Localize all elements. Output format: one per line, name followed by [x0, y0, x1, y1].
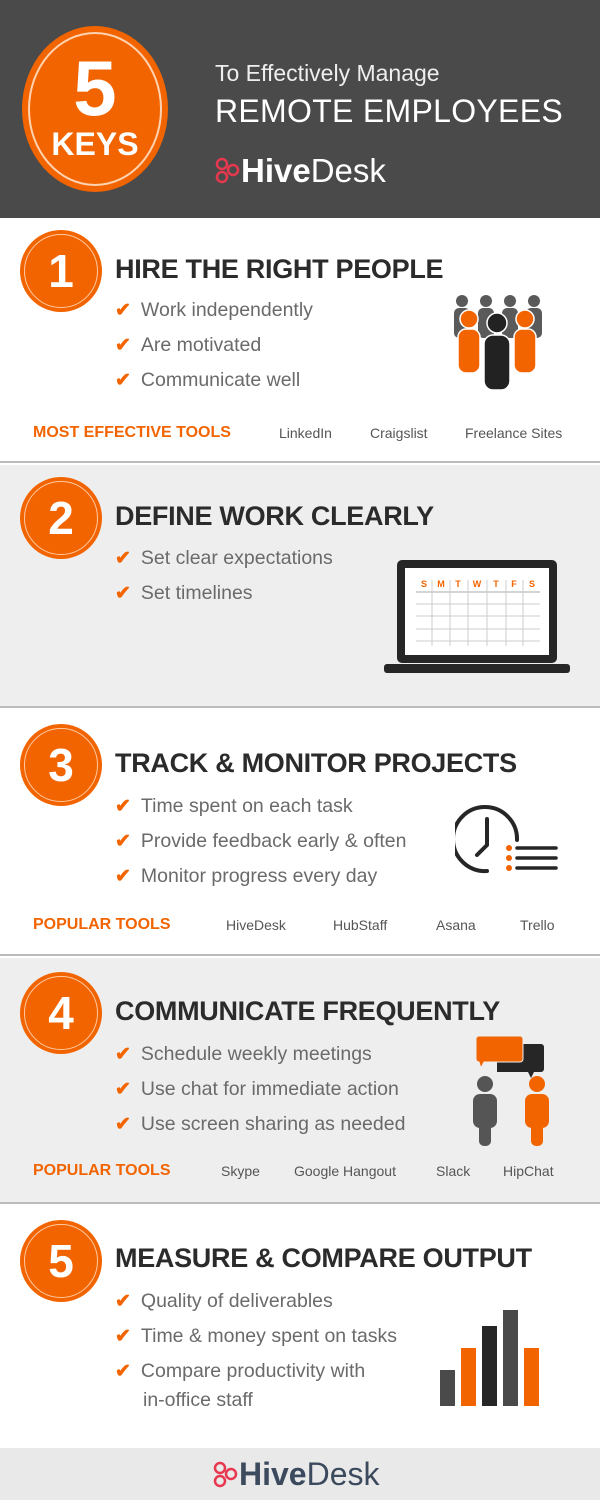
tools row 1	[33, 424, 562, 441]
header logo: HiveDesk	[241, 152, 386, 189]
heading 2: DEFINE WORK CLEARLY	[115, 501, 434, 531]
icon: laptop calendar: T	[455, 579, 461, 589]
panel: 4 communicate frequently	[0, 958, 600, 1204]
panel: 3 track & monitor projects: POPULAR TOOLS	[33, 916, 170, 933]
header	[0, 0, 600, 218]
bullets 5	[115, 1290, 397, 1411]
panel: 4 communicate frequently: POPULAR TOOLS	[33, 1162, 170, 1179]
bullets 3	[115, 795, 406, 887]
panel: 3 track & monitor projects: Asana	[436, 917, 476, 933]
number 3: 3	[48, 739, 74, 791]
footer logo: HiveDesk	[239, 1456, 380, 1492]
bullets 1	[115, 299, 313, 391]
panel: 4 communicate frequently: HipChat	[503, 1163, 554, 1179]
panel: 3 track & monitor projects: Trello	[520, 917, 554, 933]
panel: 1 hire the right people: MOST EFFECTIVE TOOLS	[33, 424, 231, 441]
panel: 3 track & monitor projects: HiveDesk	[226, 917, 286, 933]
icon: clock list	[455, 805, 558, 874]
panel: 1 hire the right people: Freelance Sites	[465, 425, 562, 441]
panel: 3 track & monitor projects	[0, 710, 600, 956]
icon: people	[454, 295, 542, 390]
icon: laptop calendar: F	[511, 579, 517, 589]
number 3	[20, 724, 102, 806]
bullets 5: ✔ Time & money spent on tasks	[115, 1325, 397, 1347]
panel: 1 hire the right people: Craigslist	[370, 425, 428, 441]
bullets 4: ✔ Use screen sharing as needed	[115, 1113, 405, 1135]
bullets 2: ✔ Set clear expectations	[115, 547, 333, 569]
header badge: 5 keys	[22, 26, 168, 192]
bullets 1: ✔ Work independently	[115, 299, 313, 321]
heading 3: TRACK & MONITOR PROJECTS	[115, 748, 517, 778]
icon: laptop calendar: W	[473, 579, 482, 589]
icon: laptop calendar: M	[437, 579, 445, 589]
panel: 1 hire the right people: LinkedIn	[279, 425, 332, 441]
bullets 1: ✔ Communicate well	[115, 369, 300, 391]
panel: 3 track & monitor projects: HubStaff	[333, 917, 387, 933]
icon: laptop calendar	[384, 560, 570, 673]
panel: 4 communicate frequently: Skype	[221, 1163, 260, 1179]
icon: laptop calendar: S	[421, 579, 427, 589]
number 5: 5	[48, 1235, 74, 1287]
icon: laptop calendar: S	[529, 579, 535, 589]
panel: 4 communicate frequently: Google Hangout	[294, 1163, 396, 1179]
bullets 5: ✔ Quality of deliverables	[115, 1290, 333, 1312]
bullets 5: in-office staff	[143, 1389, 253, 1411]
bar chart	[440, 1310, 539, 1406]
bullets 3: ✔ Monitor progress every day	[115, 865, 377, 887]
panel: 5 measure & compare output	[0, 1206, 600, 1448]
bullets 3: ✔ Time spent on each task	[115, 795, 353, 817]
panel: 1 hire the right people	[0, 218, 600, 463]
number 1: 1	[48, 245, 74, 297]
header badge: 5 keys: 5	[73, 44, 117, 132]
number 2	[20, 477, 102, 559]
icon: chatting people	[473, 1036, 549, 1146]
header badge: 5 keys: KEYS	[51, 126, 139, 162]
bullets 2: ✔ Set timelines	[115, 582, 253, 604]
tools row 4	[33, 1162, 554, 1179]
heading 4: COMMUNICATE FREQUENTLY	[115, 996, 500, 1026]
bullets 4: ✔ Use chat for immediate action	[115, 1078, 399, 1100]
tools row 3	[33, 916, 554, 933]
bullets 3: ✔ Provide feedback early & often	[115, 830, 406, 852]
number 4: 4	[48, 987, 74, 1039]
bullets 2	[115, 547, 333, 604]
heading 5: MEASURE & COMPARE OUTPUT	[115, 1243, 532, 1273]
footer	[0, 1448, 600, 1500]
number 2: 2	[48, 492, 74, 544]
panel: 4 communicate frequently: Slack	[436, 1163, 470, 1179]
number 1	[20, 230, 102, 312]
panel: 2 define work clearly	[0, 465, 600, 708]
icon: laptop calendar: T	[493, 579, 499, 589]
header title: REMOTE EMPLOYEES	[215, 93, 563, 129]
header subtitle: To Effectively Manage	[215, 60, 440, 86]
bullets 5: ✔ Compare productivity with	[115, 1360, 365, 1382]
number 4	[20, 972, 102, 1054]
heading 1: HIRE THE RIGHT PEOPLE	[115, 254, 443, 284]
bullets 4: ✔ Schedule weekly meetings	[115, 1043, 372, 1065]
bullets 1: ✔ Are motivated	[115, 334, 261, 356]
number 5	[20, 1220, 102, 1302]
bullets 4	[115, 1043, 405, 1135]
